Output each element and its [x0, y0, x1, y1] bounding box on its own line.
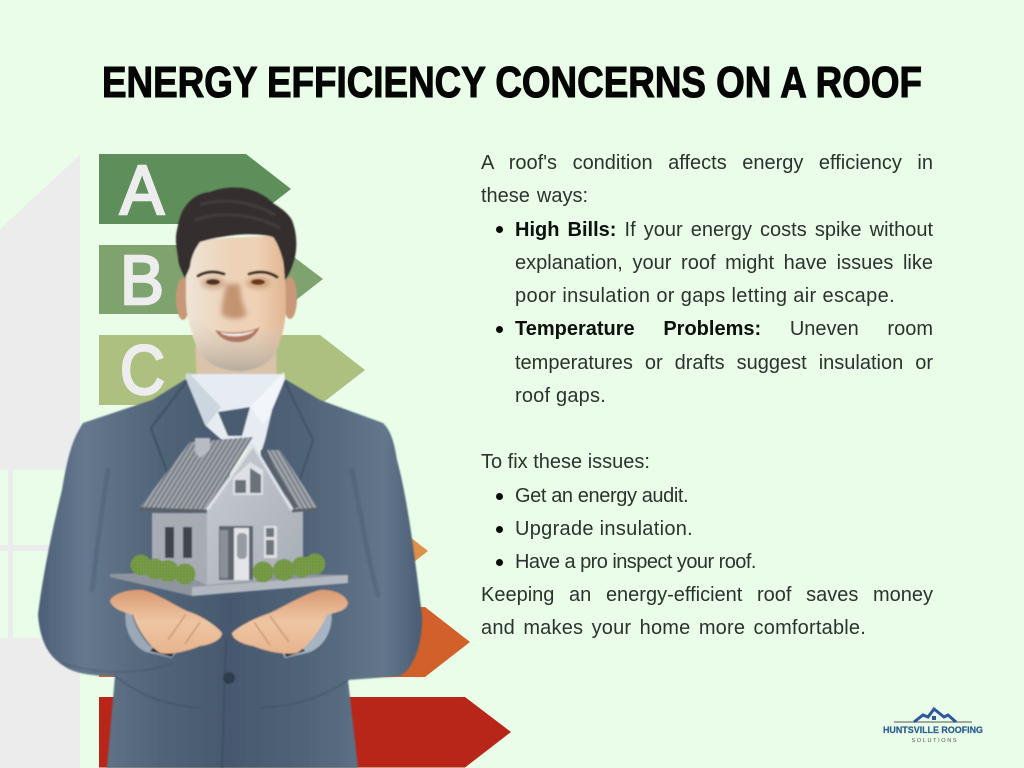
eye sockets — [201, 277, 270, 289]
bullet: insulation — [496, 526, 502, 533]
temperature problems line 1: Temperature Problems: Uneven room — [515, 318, 933, 340]
high bills line 3: poor insulation or gaps letting air escape. — [515, 285, 895, 307]
businessman — [38, 345, 422, 768]
bullet: high bills — [496, 226, 502, 233]
rating arrow C: C — [120, 331, 165, 409]
suit jacket — [38, 379, 422, 768]
closing line 1: Keeping an energy-efficient roof saves money — [481, 584, 933, 606]
fix item: inspect: Have a pro inspect your roof. — [515, 551, 756, 573]
background: grey house silhouette — [0, 155, 80, 768]
high bills line 2: explanation, your roof might have issues like — [515, 252, 933, 274]
eyes — [206, 279, 265, 285]
jacket button — [223, 672, 235, 684]
dormer window — [233, 462, 263, 495]
right cuff — [282, 610, 332, 658]
text block: roof condition explanation — [481, 152, 933, 639]
rating arrow B: B — [120, 241, 164, 319]
temperature problems line 3: roof gaps. — [515, 385, 606, 407]
rating arrow A: A — [120, 151, 164, 229]
high bills line 1: High Bills: If your energy costs spike without — [515, 219, 933, 241]
nose shadow — [221, 284, 247, 319]
rating arrow B — [99, 241, 323, 319]
side wall — [152, 513, 207, 585]
right hand — [232, 590, 348, 654]
right roof — [267, 450, 318, 510]
jaw shadow — [190, 315, 284, 371]
gable trim — [207, 445, 292, 510]
side windows — [165, 527, 192, 558]
hair highlight — [195, 201, 280, 228]
fix item: audit: Get an energy audit. — [515, 485, 688, 507]
bullet: audit — [496, 493, 502, 500]
businessman head — [176, 187, 297, 371]
fix heading: To fix these issues: — [481, 451, 650, 473]
left cuff — [125, 610, 176, 658]
rating arrow A — [99, 151, 291, 229]
face — [186, 235, 286, 371]
house model on platform — [110, 437, 348, 596]
temperature problems line 2: temperatures or drafts suggest insulation or — [515, 352, 933, 374]
right inner sleeve — [284, 646, 305, 657]
left inner sleeve — [150, 646, 174, 657]
rating arrow C — [99, 331, 365, 409]
logo: Huntsville Roofing Solutions: HUNTSVILLE ROOFING — [883, 725, 983, 736]
fix item: insulation: Upgrade insulation. — [515, 518, 693, 540]
front door and windows — [219, 526, 277, 580]
logo: Huntsville Roofing Solutions: SOLUTIONS — [912, 738, 957, 744]
left hand — [110, 590, 222, 654]
tie knot — [218, 407, 250, 436]
neck — [195, 345, 277, 425]
left shrubs — [130, 554, 196, 584]
rating arrow E — [99, 516, 428, 586]
bullet: temperature problems — [496, 326, 502, 333]
fingers — [168, 614, 289, 645]
logo: Huntsville Roofing Solutions — [883, 709, 983, 744]
left roof — [140, 437, 253, 510]
ears — [176, 277, 297, 320]
rating arrow G — [99, 697, 511, 768]
chimney — [195, 438, 210, 458]
bullet: inspect — [496, 559, 502, 566]
platform — [110, 572, 348, 596]
shirt and collar — [184, 372, 287, 450]
front wall — [207, 445, 303, 585]
mouth — [215, 327, 260, 342]
rating arrow F — [99, 607, 470, 677]
intro line 2: these ways: — [481, 185, 588, 207]
right shrubs — [252, 554, 326, 582]
hair — [176, 187, 296, 280]
suit shading — [60, 382, 378, 768]
eyebrows — [198, 272, 277, 277]
closing line 2: and makes your home more comfortable. — [481, 617, 866, 639]
intro line 1: A roof's condition affects energy efficiency in — [481, 152, 933, 174]
